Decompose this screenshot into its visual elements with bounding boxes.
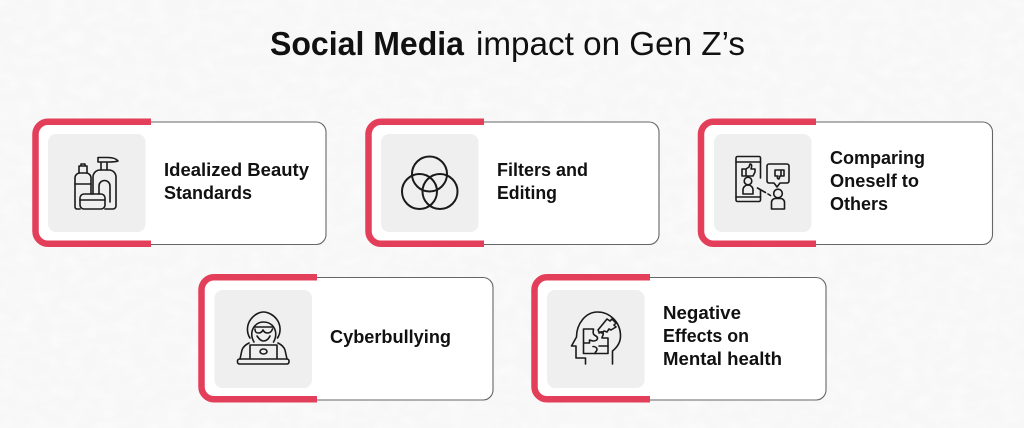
label: Filters and (497, 159, 588, 180)
icon: phone with like and dislike (736, 156, 789, 209)
label: Comparing (830, 147, 925, 168)
label: Mental health (663, 348, 782, 369)
icon: head with puzzle pieces (572, 312, 620, 364)
label: Negative (663, 302, 741, 323)
title: impact on Gen Z’s (476, 25, 745, 62)
label: Editing (497, 182, 557, 203)
icon: cosmetic bottles (75, 158, 118, 209)
label (830, 147, 925, 214)
label: Cyberbullying (330, 326, 451, 347)
panel: cyberbullying (201, 277, 493, 400)
title: Social Media (270, 25, 465, 62)
label (497, 159, 588, 203)
panel: filters and editing (368, 122, 659, 244)
title (270, 25, 745, 62)
label (663, 302, 782, 369)
label: Oneself to (830, 170, 919, 191)
label: Idealized Beauty (164, 159, 310, 180)
label: Standards (164, 182, 252, 203)
panel: idealized beauty standards (35, 122, 326, 244)
label (164, 159, 310, 203)
label: Effects on (663, 325, 749, 346)
panel: negative effects on mental health (534, 277, 826, 400)
panel: comparing oneself to others (701, 122, 992, 244)
icon: hooded hacker with laptop (238, 312, 289, 364)
icon: overlapping circles (402, 156, 458, 209)
label: Others (830, 193, 888, 214)
